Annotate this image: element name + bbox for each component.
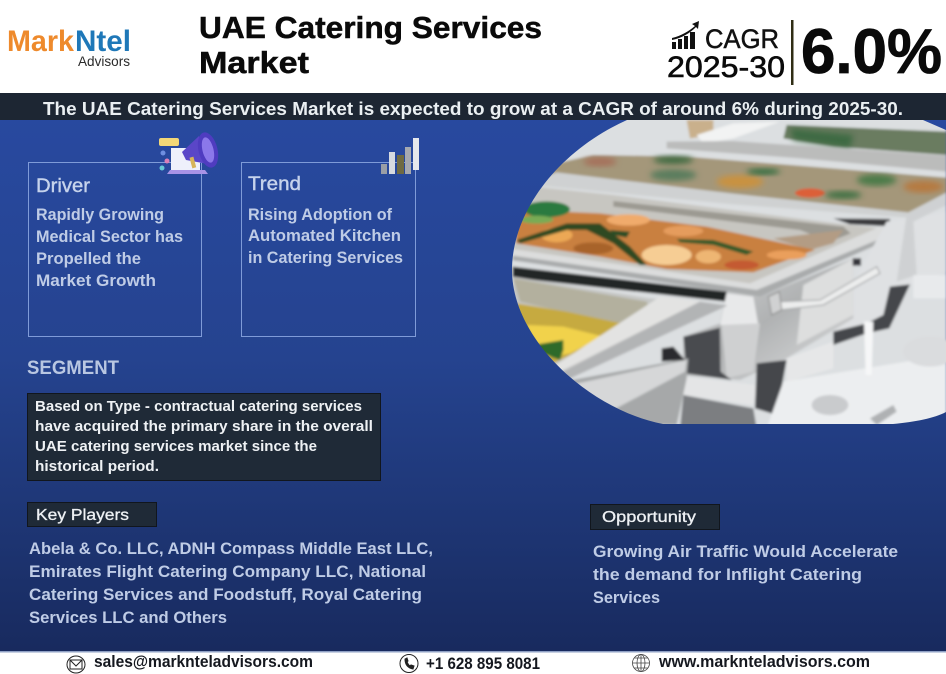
key players text: Emirates Flight Catering Company LLC, National: [29, 562, 426, 581]
main blue background: [0, 120, 946, 652]
main pan interior: [513, 187, 880, 285]
main rim: [604, 228, 877, 285]
title: Market: [199, 45, 309, 80]
website: www.marknteladvisors.com: [658, 652, 870, 671]
segment text box: historical period.: [35, 459, 159, 475]
driver text: [36, 206, 183, 290]
front pan: [512, 274, 655, 372]
trend text: Rising Adoption of: [248, 206, 392, 224]
logo: MarkNtel Advisors: [7, 25, 131, 69]
icon: rising bar chart: [672, 21, 699, 49]
main body: [683, 258, 853, 380]
trend heading: Trend: [248, 174, 301, 195]
driver text: Rapidly Growing: [36, 206, 164, 224]
handle: [780, 267, 880, 310]
opportunity text: [593, 542, 898, 607]
key players label: [28, 502, 156, 526]
key players label: Key Players: [36, 507, 129, 524]
segment heading: SEGMENT: [27, 358, 119, 379]
panel: driver: [28, 162, 202, 336]
icon: globe: [632, 654, 650, 672]
title: [199, 10, 542, 80]
key players text: [29, 539, 433, 627]
header background: [0, 0, 946, 93]
opportunity label: [590, 504, 720, 530]
opportunity text: Growing Air Traffic Would Accelerate: [593, 542, 898, 561]
CAGR block: 2025-30: [667, 51, 785, 84]
opportunity text: Services: [593, 588, 660, 607]
CAGR block: [667, 17, 942, 87]
driver text: Medical Sector has: [36, 228, 183, 246]
logo: MarkNtel Advisors: Ntel: [75, 25, 131, 58]
key players text: Abela & Co. LLC, ADNH Compass Middle East LLC,: [29, 539, 433, 558]
subtitle band: [0, 93, 946, 120]
icon: phone: [400, 654, 418, 672]
footer: [0, 651, 946, 674]
second pan: [543, 155, 946, 215]
main pan food: [516, 210, 815, 272]
icon: growth bars: [381, 138, 419, 174]
opportunity label: Opportunity: [602, 509, 696, 526]
email address: sales@marknteladvisors.com: [94, 652, 313, 671]
panel: trend: [242, 162, 416, 336]
logo: MarkNtel Advisors: Mark: [7, 25, 74, 58]
trend text: Automated Kitchen: [248, 227, 401, 245]
second pan rim: [540, 172, 946, 218]
segment text box: have acquired the primary share in the overall: [35, 419, 373, 435]
key players text: Services LLC and Others: [29, 608, 227, 627]
segment text box: [28, 394, 380, 480]
right stand: [873, 220, 896, 247]
back pan: [687, 120, 713, 138]
CAGR block: CAGR: [705, 24, 779, 54]
trend text: in Catering Services: [248, 249, 403, 267]
segment text box: UAE catering services market since the: [35, 439, 317, 455]
title: UAE Catering Services: [199, 10, 542, 45]
driver text: Propelled the: [36, 250, 141, 268]
phone number: +1 628 895 8081: [426, 654, 540, 673]
CAGR block: 6.0%: [801, 17, 942, 87]
opportunity text: the demand for Inflight Catering: [593, 565, 862, 584]
driver text: Market Growth: [36, 272, 156, 290]
logo: MarkNtel Advisors: Advisors: [78, 53, 130, 69]
icon: megaphone and laptop: [159, 130, 222, 174]
icon: email: [67, 656, 85, 673]
photo: chafing dishes with food: [500, 115, 946, 428]
driver heading: Driver: [36, 176, 91, 197]
subtitle band: The UAE Catering Services Market is expected to grow at a CAGR of around 6% during 2025-30.: [43, 98, 903, 119]
legs and base: [787, 342, 833, 382]
key players text: Catering Services and Foodstuff, Royal Catering: [29, 585, 422, 604]
segment text box: Based on Type - contractual catering services: [35, 399, 362, 415]
trend text: [248, 206, 403, 267]
